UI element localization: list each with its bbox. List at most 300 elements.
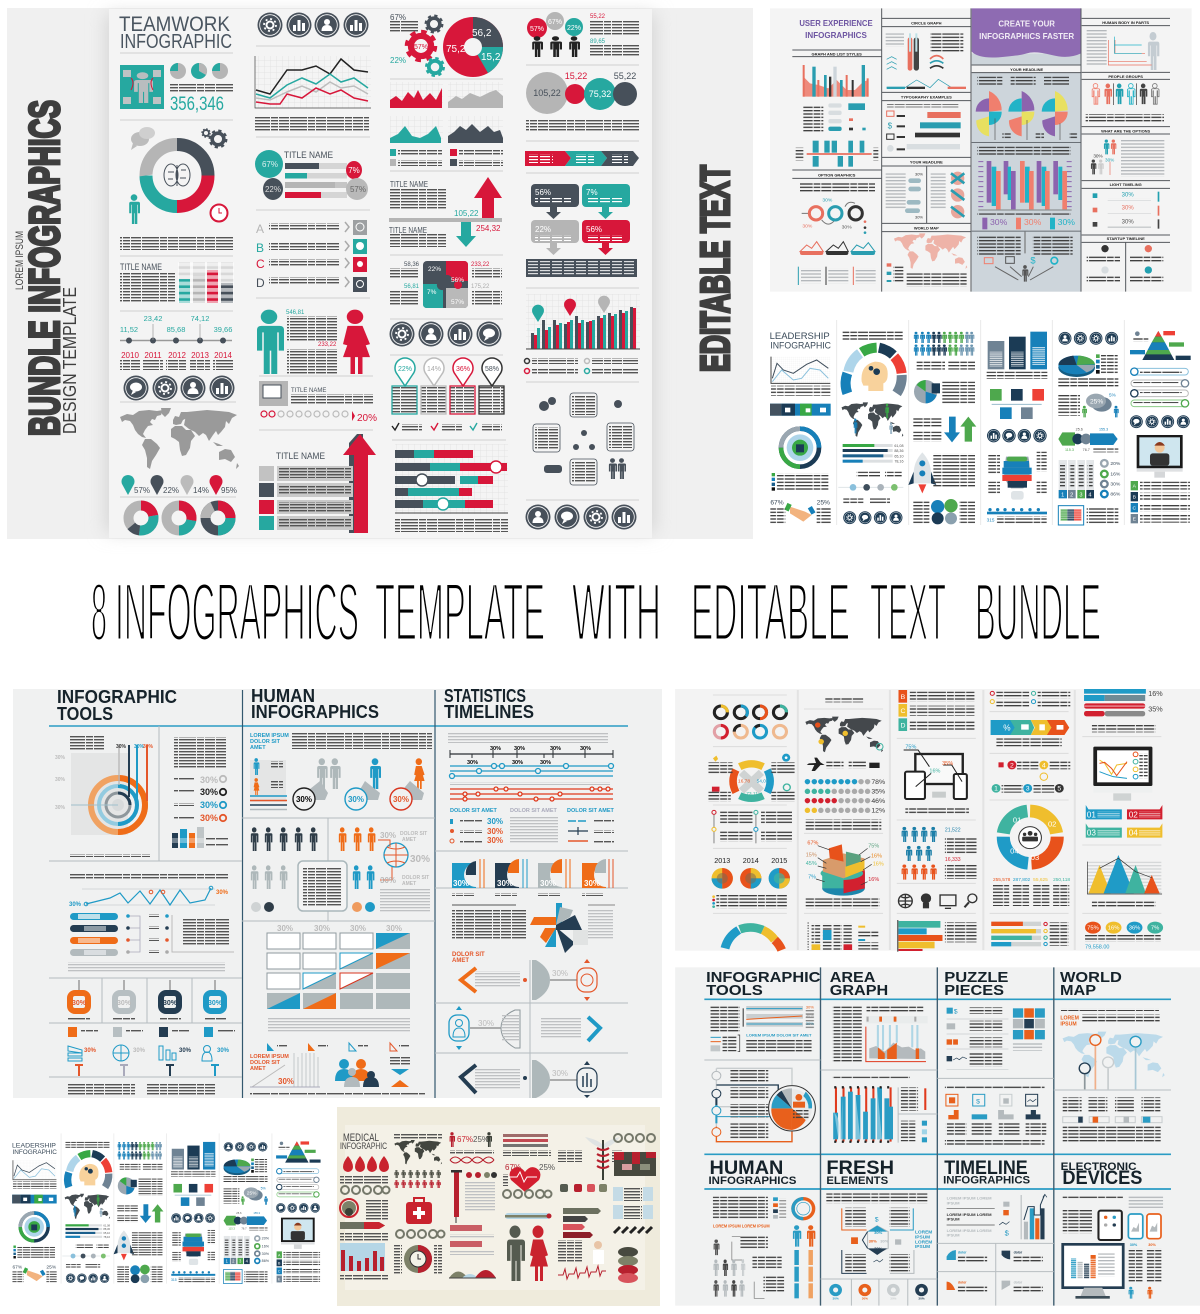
number 356,346: 356,346	[170, 94, 224, 115]
gears with percentages: 57%	[414, 44, 428, 51]
light timeline	[1093, 192, 1159, 229]
hub with people	[1019, 827, 1041, 849]
outline icons row	[68, 1045, 230, 1061]
puzzle list	[947, 1007, 1008, 1069]
figure pair with percents	[450, 1132, 494, 1155]
table	[808, 922, 879, 950]
ring legend: 30%	[200, 775, 218, 785]
what are the options figures: 30%	[1093, 153, 1103, 158]
timeline 2010-2014: 2012	[168, 351, 186, 360]
triangle chart	[1087, 855, 1162, 894]
section titles: TIMELINES	[444, 702, 534, 722]
tools bands: 30%	[806, 1021, 814, 1026]
ribbon steps	[525, 151, 639, 166]
monitor chart	[1093, 747, 1152, 801]
dial labels: 73,11	[746, 791, 758, 797]
paragraph	[843, 331, 903, 341]
section titles: TOOLS	[706, 983, 763, 999]
dot meter rows: 78%	[871, 779, 885, 786]
triangle matrix: 30%	[350, 924, 366, 933]
numbered vertical cards: 1	[1061, 492, 1064, 498]
main title: INFOGRAPHICS	[115, 567, 359, 658]
coin row	[931, 172, 964, 218]
progress bars with percent badges: 67%	[262, 160, 278, 169]
up and down arrows with text	[389, 177, 502, 247]
bar forest	[833, 1077, 927, 1142]
clock dial	[394, 1245, 442, 1275]
speech tiles with arrows: 56%	[535, 188, 551, 197]
numbers with text	[945, 828, 976, 879]
cylinder labels: 16%	[871, 854, 882, 860]
light timeline: 30%	[1122, 193, 1134, 199]
timeline 2010-2014: 39,66	[214, 325, 232, 334]
paragraph	[996, 738, 1062, 746]
outline icons row: 30%	[179, 1048, 192, 1054]
circle graph thermometers	[886, 33, 963, 71]
vertical label: lorem ipsum: LOREM IPSUM	[14, 231, 26, 290]
timeline 2010-2014: 2014	[214, 351, 232, 360]
pyramid	[1130, 331, 1191, 360]
chevron with text	[461, 959, 597, 1001]
timeline 2010-2014	[120, 314, 233, 370]
timeline quarter tiles: dolor	[958, 1280, 967, 1284]
percent blobs	[1085, 922, 1163, 934]
up and down arrows with text: TITLE NAME	[390, 180, 428, 189]
vertical heading: editable text: EDITABLE TEXT	[692, 165, 738, 372]
timeline 2010-2014: 85,68	[167, 325, 185, 334]
device with title	[259, 381, 373, 406]
world map	[120, 408, 239, 469]
option labels: 30%	[822, 197, 833, 203]
puzzle block: 56%	[451, 277, 464, 284]
paragraph	[250, 1093, 425, 1096]
pin percentages and text boxes: 36%	[456, 366, 470, 373]
section titles: TOOLS	[57, 704, 113, 724]
small donuts: 30%	[890, 1296, 897, 1300]
gears with percentages: 22%	[390, 56, 406, 65]
four text columns: 55,625	[1033, 877, 1048, 883]
three legends	[450, 808, 614, 845]
three legends: 30%	[487, 827, 503, 836]
network of speech bubbles	[533, 393, 634, 485]
timeline scale	[450, 746, 613, 766]
caduceus	[558, 1137, 622, 1180]
people with speech bubbles: 22%	[567, 25, 581, 32]
timeline 2010-2014: 2010	[121, 351, 139, 360]
your headline sliders	[886, 172, 923, 219]
cylinder labels: 16%	[868, 877, 879, 883]
human body diagram	[1087, 30, 1159, 70]
timeline infographics panel: IPSUM	[947, 1233, 960, 1238]
heading: title name: TITLE NAME	[284, 150, 333, 160]
bubble chart	[526, 71, 637, 114]
first aid kit	[406, 1198, 432, 1224]
chevron with text: 30%	[552, 969, 568, 978]
section titles: FRESH	[826, 1157, 894, 1179]
stats paragraph	[448, 733, 608, 743]
puzzle side labels: 58,36	[404, 262, 420, 268]
world map	[894, 233, 967, 269]
four clover circles	[913, 499, 975, 524]
text card	[298, 861, 347, 911]
three legends: DOLOR SIT AMET	[567, 808, 614, 814]
vertical subheading: design template: DESIGN TEMPLATE	[60, 287, 80, 434]
paragraph	[1086, 114, 1164, 123]
person with connected icons	[984, 232, 1058, 282]
chevron with text	[449, 1006, 600, 1050]
main title	[91, 567, 1101, 658]
section headings: WHAT ARE THE OPTIONS	[1101, 128, 1151, 133]
speech tiles with arrows	[531, 184, 630, 255]
lorem ipsum and stripes: LOREM IPSUM	[250, 1054, 289, 1060]
timeline scale: 30%	[514, 746, 525, 752]
column chart with pins	[526, 294, 640, 349]
human intro	[250, 733, 432, 751]
timeline quarter tiles: dolor	[1014, 1280, 1023, 1284]
heat map blocks	[614, 1152, 656, 1176]
dot meter rows: 12%	[871, 808, 885, 815]
chart legend	[390, 149, 503, 166]
small donuts: 30%	[918, 1296, 925, 1300]
typography examples: $	[888, 121, 893, 130]
icon: brain	[164, 164, 190, 186]
globe donut	[781, 429, 819, 467]
human intro: AMET	[250, 745, 266, 751]
section headings: OPTION GRAPHICS	[818, 173, 856, 178]
progress bars with percent badges: 22%	[265, 185, 281, 194]
lettered tabs: C	[900, 708, 906, 715]
timeline 2010-2014: 74,12	[191, 314, 209, 323]
man and woman text	[286, 310, 337, 374]
main title: EDITABLE	[691, 567, 850, 658]
globe with labels: AMET	[402, 837, 416, 843]
list and tag block	[803, 103, 866, 132]
paragraph	[340, 1274, 388, 1281]
striped bar columns	[178, 262, 234, 303]
numbered tags: 01	[1087, 811, 1096, 820]
list A B C D	[256, 220, 367, 292]
fresh elements panel: 30%	[874, 1230, 883, 1235]
timeline quarter tiles: dolor	[958, 1250, 967, 1254]
human infographics panel	[713, 1197, 815, 1298]
teal stacked timeline	[795, 141, 878, 167]
percent blobs: 16%	[1108, 926, 1119, 932]
big rising arrow rows	[259, 434, 376, 533]
your headline sliders: 30%	[915, 172, 923, 177]
devices illustration: 35%	[942, 761, 953, 767]
map figures	[854, 403, 893, 434]
timeline quarter tiles	[947, 1250, 1043, 1292]
four rounded badges: 30%	[117, 1000, 132, 1007]
up and down arrows	[913, 417, 976, 442]
section headings: YOUR HEADLINE	[910, 159, 943, 164]
globe with labels: DOLOR SIT	[402, 875, 429, 881]
target rings chart: 30%	[134, 744, 145, 750]
globe with labels	[378, 831, 430, 887]
person with connected icons: $	[1030, 255, 1036, 265]
option labels	[802, 197, 866, 234]
mountain timeline	[887, 79, 965, 88]
timeline infographics panel: $	[1005, 1228, 1010, 1237]
red woman figure	[343, 310, 370, 374]
plane and truck legend	[807, 758, 880, 771]
heading: title name: TITLE NAME	[120, 262, 162, 272]
fresh elements panel: 30%	[874, 1246, 883, 1251]
bubble chart: 55,22	[614, 71, 636, 81]
ring legend	[174, 775, 226, 823]
human anatomy figures	[507, 1226, 548, 1281]
pins row with 20 percent	[261, 411, 377, 424]
lettered list: B	[1133, 495, 1137, 501]
human infographics panel: LOREM IPSUM LOREM IPSUM	[713, 1223, 770, 1228]
section titles: ELEMENTS	[826, 1175, 888, 1187]
paragraph	[771, 386, 830, 396]
paragraph	[1092, 724, 1156, 732]
handshake with percents: 25%	[817, 499, 830, 506]
pin percentages and text boxes: 58%	[485, 366, 499, 373]
numbered steps: 2	[1010, 762, 1014, 769]
bottom ring chart	[725, 927, 782, 950]
puzzle block: 57%	[451, 299, 464, 306]
paragraphs	[977, 77, 1077, 255]
donut with brain	[146, 144, 208, 206]
timeline infographics panel: LOREM IPSUM LOREM	[947, 1196, 992, 1201]
bubble chart: 105,22	[533, 88, 561, 98]
main title: TEMPLATE	[375, 567, 545, 658]
devices illustration: 75%	[905, 744, 917, 750]
pie with connected labels	[712, 1068, 815, 1142]
typography examples	[887, 104, 961, 152]
dolor sit amet heading: DOLOR SIT	[452, 952, 485, 958]
section titles	[57, 686, 534, 724]
ring numbers: 04	[1010, 846, 1019, 855]
paragraph and number	[1085, 935, 1161, 950]
map pins with percentages: 57%	[134, 486, 150, 495]
up and down arrows with text: 254,32	[476, 224, 501, 233]
timeline scale: 30%	[467, 760, 478, 766]
main title: 8	[91, 567, 107, 658]
cylinder labels: 45%	[806, 861, 817, 867]
numbers with text: 21,522	[945, 828, 961, 834]
quarter tiles: 30%	[584, 879, 600, 888]
ring legend: 30%	[200, 800, 218, 810]
hex arrow chain: 155.3	[1099, 427, 1108, 431]
timeline infographics panel: LOREM IPSUM LOREM	[947, 1228, 992, 1233]
device with title: TITLE NAME	[291, 388, 326, 394]
dark world map	[394, 1140, 442, 1164]
pins row with 20 percent: 20%	[357, 413, 377, 424]
four text columns: 287,802	[1013, 877, 1031, 883]
donut grid	[714, 706, 786, 738]
tile labels	[452, 893, 604, 896]
paragraph	[70, 735, 105, 750]
dot meter rows: 46%	[871, 798, 885, 805]
blue track lines	[450, 764, 614, 778]
arrow bars	[563, 1208, 601, 1238]
icon: chat bubbles	[131, 127, 155, 150]
big pie chart: 75,2	[446, 44, 466, 55]
quarter tiles: 30%	[540, 879, 556, 888]
mountain badges	[800, 242, 875, 255]
globe with labels: DOLOR SIT	[400, 831, 427, 837]
syringes row	[614, 1227, 652, 1233]
startup timeline	[1087, 245, 1163, 283]
world map with pins: LOREM	[1060, 1015, 1079, 1021]
numbered vertical cards: 4	[1088, 492, 1092, 498]
half dots	[251, 889, 430, 913]
heart	[503, 1163, 555, 1192]
person rows and mound chart	[449, 1225, 496, 1278]
title: medical infographic	[340, 1132, 387, 1151]
quarter tiles: 30%	[497, 879, 513, 888]
section headings: WORLD MAP	[914, 225, 939, 230]
pictogram rows with percents: 35%	[1148, 706, 1163, 714]
calendar	[1058, 506, 1118, 525]
timeline scale: 30%	[512, 760, 523, 766]
bar legend with 30 percent: 30%	[990, 217, 1008, 227]
chat bubbles: 25%	[1090, 399, 1103, 406]
timeline scale: 30%	[580, 746, 591, 752]
light timeline: 30%	[1122, 219, 1134, 225]
human intro: LOREM IPSUM	[250, 733, 289, 739]
section headings: LIGHT TIMELING	[1110, 182, 1142, 187]
timeline scale: 30%	[490, 746, 501, 752]
puzzle side labels: 56,81	[404, 284, 420, 290]
man and woman text: 546,81	[286, 310, 305, 316]
globe with labels: AMET	[402, 881, 416, 887]
fresh elements panel: LOREM	[915, 1240, 932, 1246]
years with rings	[712, 857, 790, 889]
map pins with percentages: 95%	[221, 486, 237, 495]
your headline sliders: 30%	[915, 214, 923, 219]
numbered steps: 1	[994, 786, 998, 793]
timeline 2010-2014: 11,52	[120, 325, 138, 334]
timeline 2010-2014: 2011	[144, 351, 162, 360]
section titles: GRAPH	[830, 983, 888, 999]
list A B C D: B	[256, 241, 264, 255]
fresh elements panel: IPSUM	[915, 1234, 930, 1240]
progress bars: 61,08	[894, 444, 903, 448]
fresh elements panel: IPSUM	[915, 1244, 930, 1250]
up and down arrows with text: 105,22	[454, 209, 479, 218]
globe with labels: 30%	[380, 876, 396, 885]
timeline scale: 30%	[550, 746, 561, 752]
puzzle side labels	[390, 262, 502, 306]
list A B C D: C	[256, 257, 265, 271]
target rings chart	[55, 744, 154, 835]
T markers	[75, 1065, 219, 1076]
timeline infographics panel	[947, 1194, 1047, 1239]
figures with rings: 30%	[348, 795, 364, 804]
stacked pills	[618, 1247, 638, 1283]
target rings chart: 30%	[116, 744, 127, 750]
four long pills	[1131, 368, 1189, 407]
paragraph	[1092, 900, 1156, 908]
horizontal timeline	[838, 472, 903, 503]
dark text box	[526, 259, 637, 277]
icon row	[987, 429, 1047, 442]
puzzle block	[423, 261, 468, 308]
icon squares timeline	[990, 389, 1044, 419]
big pie chart	[443, 17, 503, 77]
three legends: 30%	[487, 836, 503, 845]
linked rings	[802, 202, 862, 224]
title: medical infographic: INFOGRAPHIC	[340, 1141, 387, 1151]
mini donut percents	[1101, 460, 1121, 498]
ring icon	[340, 1199, 388, 1220]
four arc dial	[733, 764, 770, 798]
icon: head	[861, 362, 888, 391]
check list	[392, 423, 502, 432]
tools bands: 30%	[806, 1013, 814, 1018]
years with rings: 2015	[771, 857, 787, 865]
numbered vertical cards	[1059, 460, 1094, 498]
fresh elements panel: LOREM	[915, 1230, 932, 1236]
text timeline	[712, 810, 792, 843]
title: leadership infographic	[770, 331, 831, 350]
lorem ipsum and stripes	[250, 1053, 320, 1087]
paragraph	[395, 518, 508, 532]
doctor and ecg	[558, 1240, 606, 1279]
what are the options figures: 30%	[1105, 158, 1114, 163]
puzzle block: 22%	[428, 266, 441, 273]
bar legend with 30 percent	[982, 217, 1075, 229]
thermometer	[505, 1213, 552, 1219]
people rows	[902, 827, 937, 880]
people rows	[394, 1170, 441, 1188]
title: medical infographic: MEDICAL	[343, 1132, 379, 1144]
icon row	[843, 511, 902, 524]
dial labels	[708, 754, 795, 802]
paragraph	[70, 873, 228, 879]
icon row	[526, 504, 636, 530]
lettered list	[1131, 481, 1190, 523]
people with speech bubbles: 67%	[548, 19, 562, 26]
arrow ribbon: %	[1003, 723, 1011, 732]
title: user experience infographics	[799, 18, 873, 40]
panel: medical infographic	[337, 1107, 660, 1306]
dial labels: 16,78	[738, 779, 750, 785]
section headings: STARTUP TIMELINE	[1107, 236, 1145, 241]
pill connectors	[126, 914, 234, 954]
progress bars with percent badges	[255, 150, 368, 200]
lettered list: A	[1133, 484, 1137, 490]
paragraph and rule	[452, 905, 615, 940]
numbered tags	[1086, 805, 1162, 838]
list A B C D: A	[256, 222, 264, 236]
blood drops	[343, 1156, 389, 1172]
section rules and column dividers	[792, 8, 1170, 292]
ring legend: 30%	[200, 813, 218, 823]
paragraph	[70, 854, 150, 857]
arrow pills	[70, 913, 118, 956]
icon row	[614, 1134, 655, 1142]
cylinder labels: 7%	[808, 874, 816, 880]
numbered vertical cards: 2	[1070, 492, 1073, 498]
triangle matrix: 30%	[314, 924, 330, 933]
electronic devices panel	[1063, 1195, 1163, 1299]
section titles: INFOGRAPHIC	[706, 970, 821, 986]
target rings chart: 30%	[55, 805, 66, 811]
icon row	[1059, 332, 1118, 345]
line chart	[771, 357, 830, 383]
people with speech bubbles	[527, 12, 583, 57]
mini donut percents: 20%	[1110, 461, 1121, 467]
what are the options figures	[1091, 139, 1164, 177]
icon row	[341, 1186, 390, 1194]
legend	[990, 691, 1070, 707]
puzzle side labels: 175,22	[471, 284, 490, 290]
